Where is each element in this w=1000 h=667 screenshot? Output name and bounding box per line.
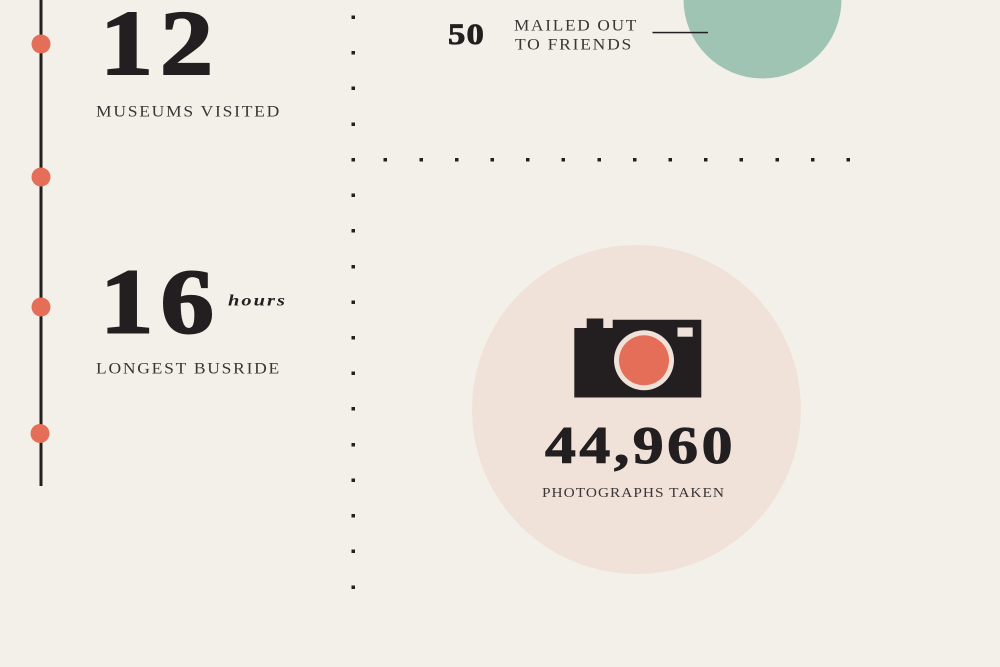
stat: longest busride: hours <box>228 292 287 310</box>
stat: photographs taken: 44,960 <box>545 417 736 475</box>
stat: museums visited <box>96 0 281 120</box>
stat: photographs taken <box>542 417 736 500</box>
stat: longest busride: 16 <box>100 250 221 352</box>
stat: mailed out to friends <box>448 18 708 54</box>
stat: museums visited: MUSEUMS VISITED <box>96 104 281 120</box>
stat: mailed out to friends: TO FRIENDS <box>515 36 633 54</box>
icon: camera <box>574 318 701 398</box>
peach circle <box>472 245 801 574</box>
timeline <box>30 0 50 486</box>
stat: mailed out to friends: 50 <box>448 19 485 51</box>
stat: mailed out to friends: MAILED OUT <box>514 18 638 34</box>
dotted dividers <box>352 16 850 589</box>
stat: photographs taken: PHOTOGRAPHS TAKEN <box>542 485 725 500</box>
green circle <box>684 0 842 78</box>
stat: longest busride <box>96 250 287 378</box>
stat: longest busride: LONGEST BUSRIDE <box>96 360 281 378</box>
